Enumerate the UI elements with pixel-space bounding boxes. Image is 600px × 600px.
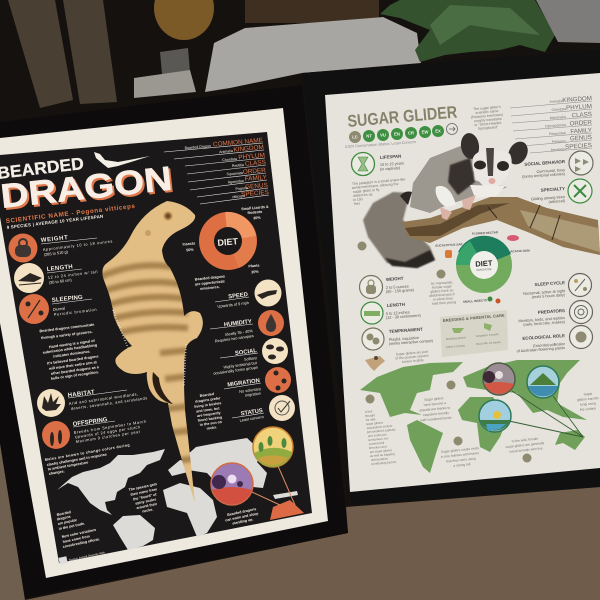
right facts: Communal, busy bbox=[536, 168, 565, 174]
text block: patagium: to 150 bbox=[353, 197, 363, 202]
chart: diet donut: EUCALYPTUS SAP bbox=[435, 242, 463, 248]
panel: breeding and parental care: Gestation: 2 weeks bbox=[476, 332, 500, 338]
taxonomy table: Chordata bbox=[551, 107, 566, 112]
mat: bearded dragon poster bbox=[0, 108, 328, 578]
taxonomy table: CLASS bbox=[245, 159, 266, 168]
text block: gestures: It's believed bearded dragons bbox=[47, 354, 99, 366]
map annotations: that they carry using bbox=[446, 456, 476, 464]
inset: woodland habitat bbox=[253, 427, 293, 467]
text block: species name: necks. bbox=[142, 507, 154, 514]
text block: threats: thought bbox=[365, 413, 375, 418]
map annotations: inquisitive friendly bbox=[423, 411, 449, 417]
world map: sugar glider range bbox=[360, 360, 587, 473]
text block: care: hold their young bbox=[432, 300, 456, 306]
text block: threats bbox=[365, 409, 397, 466]
icon: small lizard silhouette bbox=[94, 152, 150, 168]
panel: breeding and parental care bbox=[440, 310, 508, 357]
text block: pet trade: have come from bbox=[62, 534, 90, 544]
left facts: Playful, inquisitive bbox=[389, 336, 419, 342]
map annotations: gliders transfer bbox=[577, 396, 600, 402]
left facts: (12 - 30 centimeters) bbox=[386, 314, 422, 320]
icon: habitat bbox=[37, 389, 65, 417]
chart: diet donut: 20% bbox=[251, 270, 259, 274]
taxonomy table: PHYLUM bbox=[238, 152, 265, 161]
source credit: Source: Animal Diversity Web bbox=[68, 550, 106, 562]
taxonomy table: KINGDOM bbox=[562, 95, 592, 104]
chart: diet donut: DIET bbox=[217, 236, 239, 248]
text block: gestures: through a variety of gestures. bbox=[41, 330, 93, 340]
left column facts: (30 to 60 cm) bbox=[49, 277, 73, 285]
text block: standing bbox=[225, 507, 259, 526]
taxonomy table: Diprotodontia bbox=[545, 123, 566, 128]
left column facts: OFFSPRING bbox=[72, 417, 108, 428]
text block: care: abdominal pouch bbox=[429, 292, 455, 298]
text block: pet trade: dragons bbox=[56, 515, 71, 521]
right facts: PREDATORS bbox=[538, 308, 565, 315]
text block: patagium: feet bbox=[354, 202, 360, 206]
left column facts: Maximum 9 clutches per year bbox=[75, 429, 141, 444]
taxonomy table: Agamidae bbox=[228, 179, 244, 184]
right facts: (rests 5 hours daily) bbox=[532, 293, 566, 299]
text block: basking: Bearded bbox=[199, 392, 214, 398]
text block: threats: deforestation bbox=[371, 456, 389, 462]
taxonomy table: ORDER bbox=[569, 119, 593, 128]
icon: specialty bbox=[568, 179, 592, 203]
text block: gestures: submission while headbobbing bbox=[42, 343, 97, 355]
text block: species name: the "beard" of bbox=[133, 492, 158, 501]
right facts: SPECIALTY bbox=[540, 186, 565, 193]
frame: bearded dragon poster bbox=[0, 85, 348, 598]
connector lines to Australia bbox=[509, 391, 583, 437]
text block: threats: populations include bbox=[367, 424, 393, 430]
icon: lifespan bbox=[352, 152, 374, 176]
text block: care: female sugar bbox=[432, 284, 453, 290]
inset: river habitat bbox=[479, 400, 511, 432]
text block: basking: are frequently bbox=[197, 411, 221, 418]
taxonomy table: ORDER bbox=[243, 167, 267, 176]
panel: breeding and parental care: BREEDING & PARENTAL CARE bbox=[443, 313, 505, 323]
text block: genus note: to "Short-Headed bbox=[474, 121, 502, 127]
right column facts: migration bbox=[245, 391, 261, 398]
text block: species name: around their bbox=[136, 502, 158, 510]
taxonomy table: FAMILY bbox=[244, 174, 268, 183]
title: Sugar Glider: SUGAR GLIDER bbox=[347, 102, 458, 131]
right facts: ECOLOGICAL ROLE bbox=[522, 333, 565, 341]
text block: basking: dragons prefer bbox=[195, 396, 221, 404]
chart: diet donut: FLOWER NECTAR bbox=[472, 230, 499, 236]
taxonomy table: PHYLUM bbox=[566, 103, 592, 112]
icon: sleep cycle bbox=[568, 274, 592, 296]
taxonomy table: breviceps bbox=[551, 147, 566, 152]
left facts: WEIGHT bbox=[386, 276, 404, 282]
text block: basking: found basking bbox=[197, 415, 222, 423]
map annotations: the surface bbox=[580, 406, 596, 412]
map annotations: In the wild, female bbox=[511, 437, 538, 443]
illustration: sugar glider body bbox=[400, 145, 507, 213]
map annotations: Sugar gliders create nests bbox=[441, 446, 479, 454]
conservation status badges: IUCN Conservation Status: Least Concern bbox=[345, 140, 416, 149]
text block: gestures: Hand waving is a signal of bbox=[49, 339, 96, 349]
text block: species name bbox=[128, 482, 158, 514]
text block: care: Sugar gliders are part bbox=[395, 350, 428, 356]
right column facts: Highly territorial but bbox=[223, 360, 258, 370]
text block: gestures: other bearded dragons as a bbox=[51, 365, 100, 376]
left column facts bbox=[41, 235, 147, 444]
left facts: 2 to 5 ounces bbox=[386, 284, 409, 290]
left facts: TEMPERAMENT bbox=[389, 327, 423, 334]
chart: diet donut: 50% bbox=[186, 248, 194, 252]
right column facts: STATUS bbox=[240, 408, 263, 417]
taxonomy table: vitticeps bbox=[232, 194, 245, 199]
text block: color change: Males are known to change colors during bbox=[44, 443, 130, 462]
text block: care: in which they bbox=[433, 296, 453, 302]
left column facts: Diurnal bbox=[53, 306, 65, 312]
icon: sleeping bbox=[19, 294, 49, 324]
text block: pet trade: Bearded bbox=[56, 510, 71, 517]
map annotations: fungi using bbox=[580, 401, 596, 407]
conservation status badges bbox=[345, 124, 458, 149]
inset: island habitat bbox=[527, 366, 559, 398]
text block: standing: Bearded dragons bbox=[227, 507, 257, 517]
left facts: 10 to 15 years bbox=[380, 161, 404, 167]
taxonomy table: Mammalia bbox=[550, 115, 566, 120]
text block: threats: commercial bbox=[369, 441, 385, 446]
left column facts: Breeds from September to March bbox=[73, 419, 146, 435]
taxonomy table: FAMILY bbox=[570, 127, 592, 135]
text block: gestures: indicates dominance. bbox=[53, 349, 91, 359]
title: Bearded Dragon: DRAGON bbox=[0, 160, 174, 216]
text block: genus note bbox=[471, 105, 503, 131]
taxonomy table: Chordata bbox=[222, 157, 237, 162]
icon: predators bbox=[570, 300, 592, 324]
text block: care: of the possum species bbox=[395, 354, 429, 360]
text block: threats: pet sugar gliders bbox=[370, 448, 393, 454]
taxonomy table: GENUS bbox=[570, 134, 592, 143]
text block: genus note: (Petaurus breviceps) bbox=[471, 113, 503, 119]
text block: patagium: aerial membrane, allowing the bbox=[352, 182, 399, 190]
left column facts: Upwards of 24 eggs per clutch bbox=[74, 424, 140, 439]
icon: ecological role bbox=[570, 326, 592, 348]
chart: diet donut bbox=[435, 230, 530, 304]
text block: care: gliders have an bbox=[430, 288, 454, 294]
panel: breeding and parental care: Pouch life: 10 weeks bbox=[476, 340, 501, 346]
conservation status badges: NT bbox=[366, 134, 372, 138]
map annotations: Sugar gliders bbox=[424, 396, 444, 402]
text block: threats: sugar gliders bbox=[366, 420, 384, 426]
right column facts: Least concern bbox=[239, 414, 264, 423]
taxonomy table: KINGDOM bbox=[233, 144, 264, 154]
right column facts: HUMIDITY bbox=[224, 319, 252, 328]
right facts: SOCIAL BEHAVIOR bbox=[524, 159, 566, 167]
left facts: (in captivity) bbox=[380, 166, 401, 171]
right column facts: SPEED bbox=[228, 292, 248, 300]
right column facts bbox=[210, 292, 264, 423]
text block: standing: can swim and sleep bbox=[225, 511, 259, 522]
icon: status bbox=[269, 395, 295, 421]
illustration: branch bbox=[402, 197, 600, 255]
conservation status badges: VU bbox=[380, 132, 386, 138]
chart: diet donut: ACACIA GUM bbox=[510, 248, 530, 254]
icon: speed bbox=[254, 280, 282, 306]
text block: basking: in the sun on bbox=[200, 420, 222, 427]
right facts: (arboreal) bbox=[548, 199, 566, 204]
text block: color change: changes. bbox=[48, 469, 65, 476]
right column facts: occasionally forms groups bbox=[213, 365, 258, 376]
right facts bbox=[517, 159, 566, 353]
inset: desert sunset habitat bbox=[211, 463, 253, 505]
map annotations bbox=[419, 392, 600, 468]
taxonomy table: Reptilia bbox=[232, 163, 244, 168]
left facts: (60 - 150 grams) bbox=[386, 288, 415, 294]
right facts: SLEEP CYCLE bbox=[534, 280, 565, 287]
conservation status badges: CR bbox=[408, 130, 414, 136]
map annotations: well-socialized bonds bbox=[420, 416, 452, 422]
text block: color change: to ambient temperature bbox=[47, 460, 89, 471]
text block: threats: as well as trapping bbox=[370, 452, 395, 458]
icon: social bbox=[262, 338, 288, 364]
chart: diet donut: Rodents bbox=[247, 210, 262, 215]
text block: genus note: scientific name bbox=[475, 109, 499, 115]
world map: bearded dragon range bbox=[57, 438, 304, 550]
chart: diet donut: OMNIVORE bbox=[476, 267, 492, 272]
right facts: Nocturnal; active at night bbox=[523, 289, 566, 296]
right facts: (forms territorial colonies) bbox=[522, 172, 566, 179]
connector lines to Australia bbox=[252, 466, 295, 505]
taxonomy table: COMMON NAME bbox=[213, 137, 263, 148]
right column facts: Upwards of 9 mph bbox=[217, 300, 249, 309]
right column facts: Requires two canopies bbox=[214, 333, 254, 343]
text block: basking: rocks. bbox=[206, 425, 217, 431]
conservation status badges: EW bbox=[422, 130, 428, 134]
subtitle: scientific name: SCIENTIFIC NAME - Pogona vitticeps bbox=[5, 203, 136, 225]
illustration: glider paws bbox=[440, 195, 476, 220]
left column facts: 12 to 24 inches w/ tail bbox=[48, 269, 98, 280]
text block: gestures: Bearded dragons communicate bbox=[39, 323, 94, 333]
left facts bbox=[380, 154, 434, 346]
right column facts: SOCIAL bbox=[235, 348, 258, 357]
right column facts: No voluntary bbox=[239, 386, 261, 394]
poster: bearded dragon background bbox=[0, 132, 312, 563]
map annotations: sugar gliders are generally bbox=[505, 441, 545, 449]
chart: diet donut: Insects bbox=[182, 241, 195, 247]
text block: patagium: distances up bbox=[353, 192, 373, 198]
text block: genus note: The sugar glider's bbox=[473, 105, 501, 111]
frame: sugar glider poster bbox=[302, 50, 600, 505]
chart: diet donut: are opportunistic bbox=[195, 279, 225, 287]
text block: species name: their name from bbox=[130, 487, 157, 497]
right facts: Gliding among trees bbox=[531, 195, 565, 201]
icon: migration bbox=[265, 367, 291, 393]
map annotations: a strong tail bbox=[453, 462, 471, 468]
text block: species name: The species gets bbox=[128, 482, 157, 492]
text block: basking bbox=[194, 392, 222, 431]
map annotations: popular pet thanks to bbox=[419, 406, 451, 412]
text block: basking: and trees, but bbox=[196, 406, 221, 414]
left facts: 5 to 12 inches bbox=[386, 310, 410, 316]
text block: pet trade: crossbreeding efforts. bbox=[62, 537, 100, 549]
map annotations: Sugar bbox=[583, 392, 593, 396]
text block: patagium bbox=[352, 177, 406, 206]
text block: pet trade bbox=[56, 510, 100, 549]
icon: flying glider bbox=[365, 356, 385, 371]
icon: offspring bbox=[42, 421, 70, 449]
right facts: Monitors, birds, and reptiles bbox=[518, 316, 565, 323]
taxonomy table: Animalia bbox=[549, 99, 563, 104]
chart: diet donut: SMALL INSECTS bbox=[463, 298, 487, 304]
text block: pet trade: in the pet trade. bbox=[58, 522, 85, 531]
map: australia highlighted bbox=[270, 500, 304, 520]
text block: threats: A first bbox=[365, 409, 373, 414]
icon: weight bbox=[360, 276, 382, 298]
left column facts: HABITAT bbox=[68, 390, 95, 399]
right facts: (owls, feral cats, snakes) bbox=[523, 320, 566, 327]
text block: threats: and exotic pet bbox=[368, 432, 387, 438]
text block: threats: contributing factors bbox=[371, 460, 397, 466]
subtitle: scientific name: 9 SPECIES | AVERAGE 10 YEAR LIFESPAN bbox=[7, 214, 103, 230]
left facts: (seeks interactive contact) bbox=[389, 339, 434, 346]
illustration: bearded dragon bbox=[100, 201, 203, 503]
text block: genus note: Springboard" bbox=[478, 125, 499, 131]
illustration: sugar glider head bbox=[459, 132, 532, 198]
taxonomy table bbox=[510, 95, 593, 153]
right facts: Essential pollinator bbox=[533, 342, 566, 348]
right facts: of Australian flowering plants bbox=[517, 346, 565, 353]
right column facts: Ideally 35 - 40% bbox=[225, 328, 254, 337]
icon: social behavior bbox=[569, 151, 593, 175]
taxonomy table: Bearded Dragon bbox=[184, 144, 211, 150]
map marker icons bbox=[358, 242, 532, 462]
taxonomy table: SPECIES bbox=[565, 142, 592, 151]
text block: pet trade: New color variations bbox=[61, 528, 97, 539]
taxonomy table: Petaurus bbox=[552, 139, 566, 144]
taxonomy table: GENUS bbox=[245, 182, 268, 191]
taxonomy table: Petauridae bbox=[549, 131, 566, 136]
chart: diet donut: Small Lizards & bbox=[241, 205, 269, 211]
text block: gestures bbox=[39, 323, 100, 381]
text block: patagium: The patagium is a small snake-like bbox=[352, 177, 406, 186]
text block: species name: spiny scales bbox=[135, 497, 157, 506]
left column facts: Approximately 10 to 18 ounces bbox=[43, 238, 113, 252]
inset: desert habitat bbox=[483, 363, 515, 395]
panel: breeding and parental care: Litters 1-2 joeys bbox=[446, 343, 466, 349]
text block: genus note: roughly translates bbox=[474, 117, 502, 123]
text block: threats: consumers, too bbox=[368, 436, 389, 442]
chart: diet donut: Bearded dragons bbox=[195, 274, 225, 282]
taxonomy table bbox=[164, 137, 269, 204]
taxonomy table: Squamata bbox=[226, 171, 243, 176]
left column facts: SLEEPING bbox=[52, 295, 83, 304]
conservation status badges: LC bbox=[352, 134, 358, 140]
text block: threats: personalized captivity bbox=[367, 427, 396, 434]
map annotations: in tree hollows with leaves bbox=[441, 451, 479, 459]
text block: pet trade: are popular bbox=[57, 518, 78, 526]
text block: threats: breeders and bbox=[369, 444, 387, 450]
text block: standing: standing up. bbox=[232, 517, 254, 526]
left facts: LENGTH bbox=[387, 302, 405, 308]
left facts: LIFESPAN bbox=[380, 154, 401, 160]
source credit bbox=[58, 550, 106, 565]
left column facts: LENGTH bbox=[47, 264, 73, 273]
map annotations: social animals who live bbox=[509, 446, 543, 454]
text block: gestures: hello or sign of recognition. bbox=[51, 370, 99, 381]
chart: diet donut: DIET bbox=[475, 258, 493, 269]
title: Bearded Dragon: DRAGON bbox=[1, 162, 176, 218]
illustration: tail of sugar glider bbox=[363, 192, 435, 268]
icon: humidity bbox=[258, 310, 284, 336]
text block: care: As marsupials, bbox=[431, 280, 453, 286]
text block: gestures: will wave their entire arm at bbox=[48, 360, 98, 371]
taxonomy table: Animalia bbox=[219, 149, 233, 154]
text block: color change bbox=[44, 443, 130, 476]
panel: breeding and parental care: Breeding season bbox=[446, 335, 467, 341]
taxonomy table: CLASS bbox=[571, 111, 592, 119]
left column facts: Periodic brumation bbox=[54, 307, 97, 317]
text block: basking: living in bushes bbox=[194, 401, 222, 409]
icon: length bbox=[361, 302, 383, 324]
chart: diet donut bbox=[182, 205, 269, 291]
map annotations: have become a bbox=[424, 401, 446, 407]
text block: care bbox=[395, 280, 456, 364]
text block: threats: for wild bbox=[366, 417, 376, 422]
left column facts: (285 to 510 g) bbox=[44, 249, 69, 257]
taxonomy table: Pogona bbox=[235, 186, 248, 191]
text block: color change: clashy challenges and in response bbox=[46, 452, 107, 467]
conservation status badges: EX bbox=[435, 128, 441, 134]
left column facts: deserts, savannahs, and scrublands bbox=[70, 395, 147, 411]
left column facts: WEIGHT bbox=[41, 235, 68, 244]
icon: temperament bbox=[362, 328, 384, 350]
chart: diet donut: 30% bbox=[253, 216, 261, 220]
right column facts: MIGRATION bbox=[227, 378, 260, 389]
conservation status badges: EN bbox=[394, 132, 400, 136]
chart: diet donut: omnivores. bbox=[200, 285, 220, 291]
text block: care: known to glide bbox=[402, 358, 424, 364]
left column facts: Arid and subtropical woodlands, bbox=[68, 391, 138, 406]
icon: weight bbox=[8, 234, 38, 262]
taxonomy table: SPECIES bbox=[241, 189, 269, 198]
text block: patagium: sugar glider to fly bbox=[353, 188, 380, 194]
icon: length bbox=[14, 263, 44, 293]
right column facts: Solitary bbox=[244, 355, 257, 362]
poster: sugar glider paper bbox=[325, 73, 600, 492]
chart: diet donut: Plants bbox=[248, 264, 260, 268]
